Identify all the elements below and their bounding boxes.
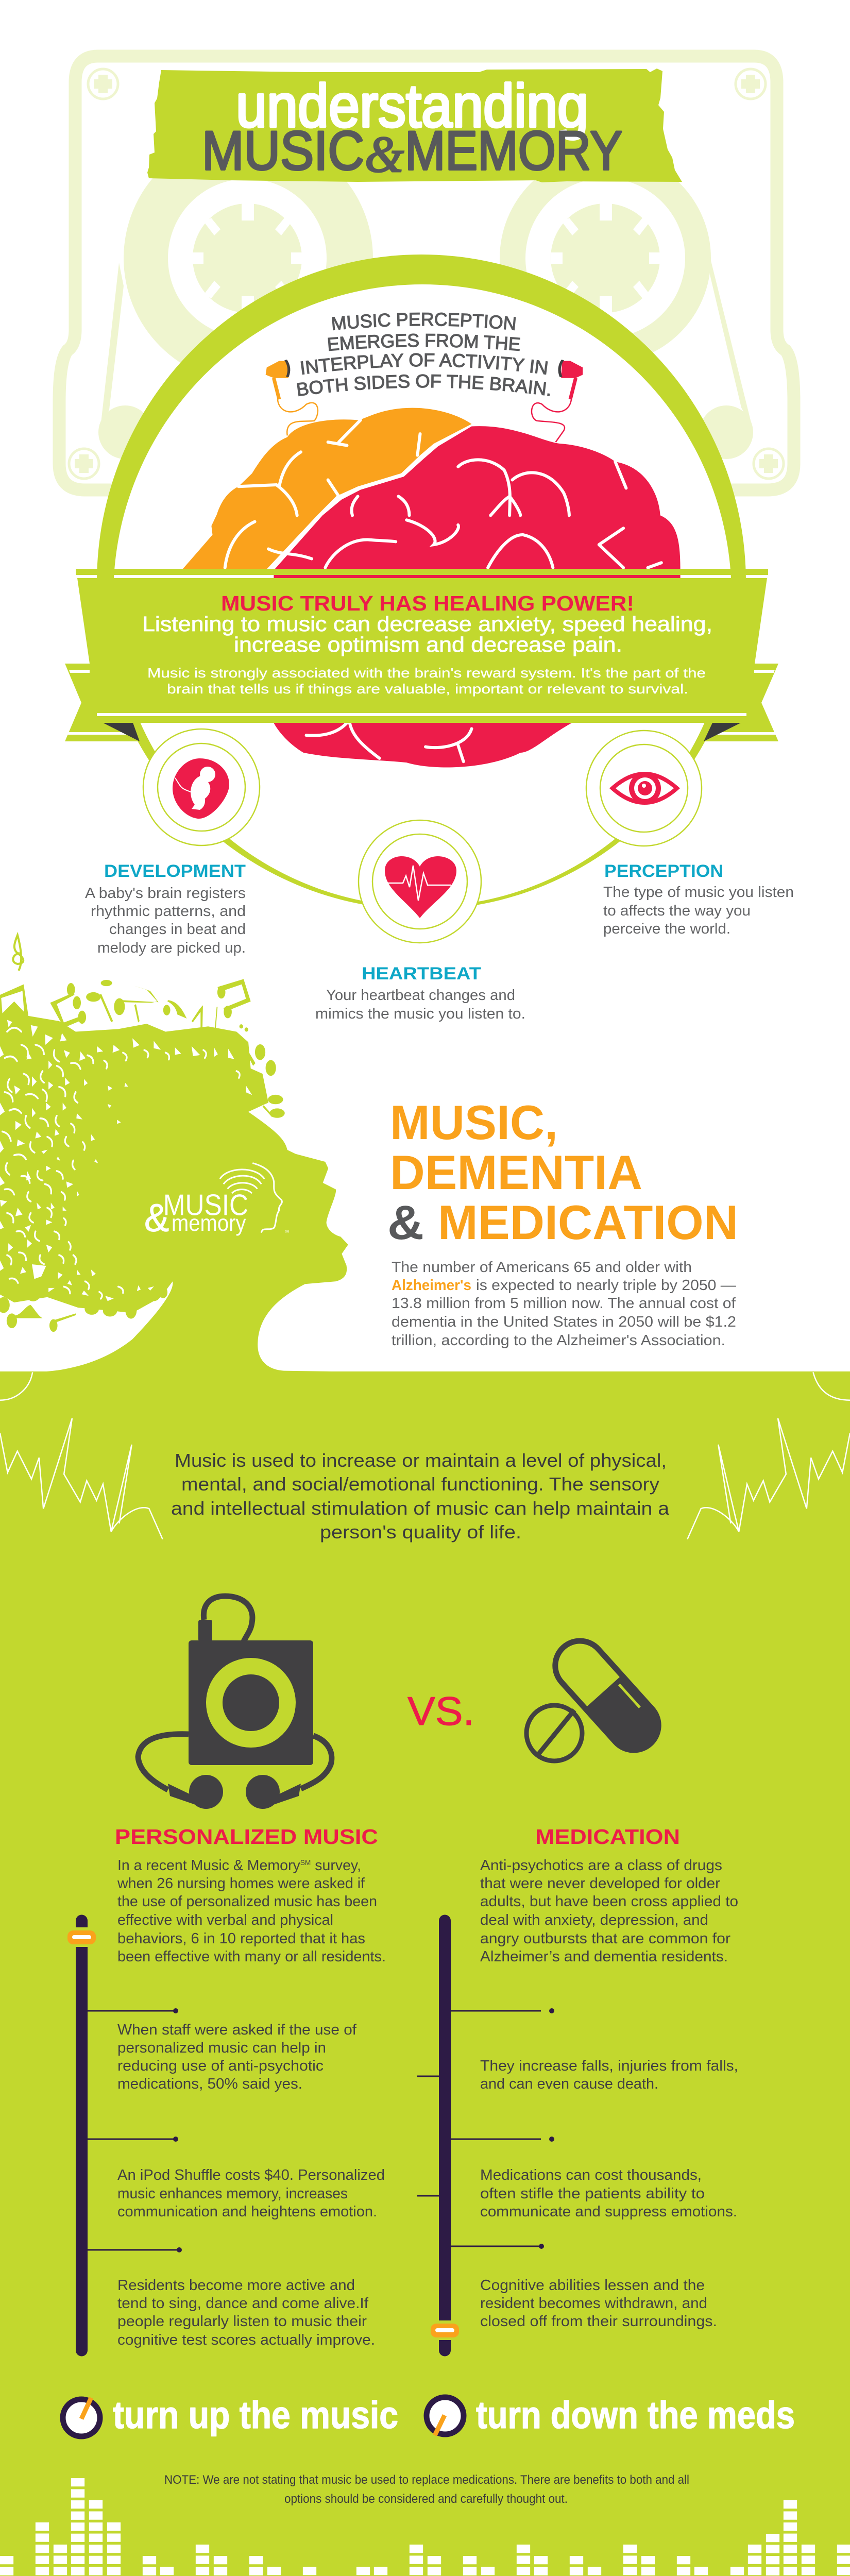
music and memory logo: SM bbox=[285, 1231, 290, 1234]
development text: A baby's brain registers bbox=[85, 885, 246, 902]
music and memory logo bbox=[144, 1189, 290, 1240]
equalizer bars bbox=[7, 2478, 844, 2576]
medication text: often stifle the patients ability to bbox=[480, 2185, 705, 2202]
personalized music text: An iPod Shuffle costs $40. Personalized bbox=[117, 2167, 385, 2183]
medication text: Cognitive abilities lessen and the bbox=[480, 2277, 705, 2294]
personalized music text: Residents become more active and bbox=[117, 2277, 355, 2294]
slogan: turn up the music: turn up the music bbox=[113, 2394, 398, 2436]
slogan: turn down the meds: turn down the meds bbox=[476, 2394, 795, 2436]
arched brain caption bbox=[297, 312, 550, 397]
personalized music text: when 26 nursing homes were asked if bbox=[117, 1875, 365, 1892]
title banner bbox=[147, 69, 682, 183]
quality of life text: mental, and social/emotional functioning. The sensory bbox=[181, 1473, 659, 1495]
head shape bbox=[0, 985, 371, 1389]
music and memory logo: memory bbox=[172, 1210, 246, 1236]
head arch bbox=[97, 255, 746, 910]
quality of life text bbox=[171, 1450, 670, 1543]
music and memory logo: & bbox=[144, 1196, 169, 1240]
personalized music text: the use of personalized music has been bbox=[117, 1893, 377, 1910]
title words: music & memory: MUSIC bbox=[202, 120, 364, 181]
personalized music text: survey, bbox=[311, 1857, 361, 1874]
title words: music & memory bbox=[202, 120, 622, 183]
personalized music text bbox=[117, 1857, 386, 2348]
icon: development fetus bbox=[143, 729, 260, 845]
outlying notes bbox=[0, 979, 285, 1332]
personalized music text: communication and heightens emotion. bbox=[117, 2204, 377, 2220]
arched brain caption: MUSIC PERCEPTION bbox=[332, 312, 516, 331]
personalized music text: In a recent Music & Memory bbox=[117, 1857, 303, 1874]
medication text: deal with anxiety, depression, and bbox=[480, 1912, 708, 1928]
heartbeat text: mimics the music you listen to. bbox=[315, 1006, 525, 1022]
healing power ribbon bbox=[65, 569, 778, 741]
ribbon detail text bbox=[147, 665, 706, 697]
medication text: and can even cause death. bbox=[480, 2076, 658, 2092]
logo sound arcs and profile bbox=[220, 1163, 282, 1233]
disclaimer note: NOTE: We are not stating that music be used to replace medications. There are benefits to both and all bbox=[164, 2473, 689, 2487]
small white gaps between notes bbox=[0, 991, 252, 1301]
brain folds bbox=[225, 420, 661, 761]
audio waveform right bbox=[687, 1372, 850, 1539]
personalized music text: tend to sing, dance and come alive.If bbox=[117, 2295, 369, 2312]
medication text: They increase falls, injuries from falls, bbox=[480, 2058, 738, 2074]
medication text: Anti-psychotics are a class of drugs bbox=[480, 1857, 722, 1874]
quality of life text: person's quality of life. bbox=[320, 1521, 521, 1543]
heading: music dementia medication: DEMENTIA bbox=[390, 1145, 642, 1199]
alzheimer's statistic text: dementia in the United States in 2050 will be $1.2 bbox=[392, 1314, 736, 1330]
disclaimer note bbox=[164, 2473, 689, 2506]
ribbon statement: increase optimism and decrease pain. bbox=[234, 633, 622, 656]
heading: music dementia medication: MUSIC, bbox=[390, 1095, 558, 1149]
title words: music & memory: MEMORY bbox=[405, 120, 622, 181]
orange hemisphere bbox=[182, 408, 472, 570]
cassette tape background illustration bbox=[59, 56, 794, 490]
title word: understanding: understanding bbox=[236, 72, 588, 140]
medication text: Medications can cost thousands, bbox=[480, 2167, 702, 2183]
personalized music text: cognitive test scores actually improve. bbox=[117, 2332, 375, 2348]
alzheimer's statistic text: trillion, according to the Alzheimer's Association. bbox=[392, 1332, 725, 1349]
audio waveform left bbox=[0, 1372, 163, 1539]
personalized music text: music enhances memory, increases bbox=[117, 2185, 348, 2202]
title words: music & memory: & bbox=[365, 126, 404, 183]
icon: heartbeat bbox=[359, 820, 481, 943]
perception text: perceive the world. bbox=[603, 921, 730, 937]
perception text: to affects the way you bbox=[603, 903, 751, 919]
medication text: resident becomes withdrawn, and bbox=[480, 2295, 707, 2312]
icon: pills bbox=[526, 1629, 672, 1764]
alzheimer's statistic text bbox=[392, 1259, 736, 1349]
personalized music text: reducing use of anti-psychotic bbox=[117, 2058, 324, 2074]
perception text bbox=[603, 861, 794, 937]
perception text: The type of music you listen bbox=[603, 884, 794, 901]
ribbon detail text: brain that tells us if things are valuable, important or relevant to survival. bbox=[167, 681, 688, 697]
quality of life text: Music is used to increase or maintain a level of physical, bbox=[175, 1450, 667, 1471]
development text: melody are picked up. bbox=[97, 940, 246, 956]
icon: volume knob up bbox=[63, 2398, 100, 2436]
development text bbox=[85, 861, 246, 956]
heartbeat text: Your heartbeat changes and bbox=[326, 987, 515, 1004]
personalized music text: people regularly listen to music their bbox=[117, 2313, 367, 2330]
heartbeat text bbox=[315, 964, 525, 1022]
medication text bbox=[480, 1857, 738, 2330]
disclaimer note: options should be considered and carefully thought out. bbox=[284, 2492, 568, 2506]
slider: personalized music track bbox=[67, 1914, 182, 2357]
medication text: that were never developed for older bbox=[480, 1875, 720, 1892]
personalized music text: When staff were asked if the use of bbox=[117, 2022, 357, 2038]
personalized music text: been effective with many or all residents. bbox=[117, 1948, 386, 1965]
medication text: closed off from their surroundings. bbox=[480, 2313, 717, 2330]
medication text: Alzheimer’s and dementia residents. bbox=[480, 1948, 728, 1965]
development text: rhythmic patterns, and bbox=[91, 903, 246, 920]
earbuds bbox=[266, 360, 583, 442]
icon: volume knob down bbox=[427, 2397, 464, 2435]
music and memory logo: MUSIC bbox=[163, 1189, 248, 1222]
personalized music text: personalized music can help in bbox=[117, 2040, 326, 2056]
development text: DEVELOPMENT bbox=[104, 861, 246, 881]
pink hemisphere bbox=[274, 426, 681, 768]
quality of life text: and intellectual stimulation of music can help maintain a bbox=[171, 1498, 670, 1519]
alzheimer's statistic text: 13.8 million from 5 million now. The annual cost of bbox=[392, 1295, 736, 1312]
personalized music text: SM bbox=[300, 1858, 311, 1867]
ribbon detail text: Music is strongly associated with the brain's reward system. It's the part of the bbox=[147, 665, 706, 681]
personalized music text: effective with verbal and physical bbox=[117, 1912, 333, 1928]
curved white note outlines bbox=[3, 1028, 240, 1299]
heading: music dementia medication: MEDICATION bbox=[438, 1195, 738, 1249]
orange earbud bbox=[266, 360, 318, 435]
ribbon statement: Listening to music can decrease anxiety, speed healing, bbox=[142, 612, 712, 636]
personalized music text: medications, 50% said yes. bbox=[117, 2076, 302, 2092]
icon: treble clef bbox=[13, 935, 23, 971]
perception text: PERCEPTION bbox=[604, 861, 723, 881]
heading: music dementia medication bbox=[387, 1095, 738, 1249]
heartbeat text: HEARTBEAT bbox=[362, 964, 481, 984]
arched brain caption: EMERGES FROM THE bbox=[328, 333, 520, 351]
icon: perception eye bbox=[586, 731, 702, 846]
alzheimer's statistic text: is expected to nearly triple by 2050 — bbox=[476, 1277, 736, 1294]
icon: music player with earbuds bbox=[138, 1596, 332, 1809]
heading: music dementia medication: & bbox=[387, 1195, 424, 1249]
head silhouette with musical notes bbox=[0, 979, 371, 1389]
red earbud bbox=[532, 360, 583, 442]
alzheimer's statistic text: Alzheimer's bbox=[392, 1277, 471, 1294]
medication text: communicate and suppress emotions. bbox=[480, 2204, 737, 2220]
brain bbox=[182, 408, 681, 768]
column heading: medication: MEDICATION bbox=[535, 1825, 680, 1849]
slider: medication track bbox=[417, 1914, 554, 2357]
alzheimer's statistic text: The number of Americans 65 and older with bbox=[392, 1259, 692, 1276]
medication text: adults, but have been cross applied to bbox=[480, 1893, 738, 1910]
ribbon headline: MUSIC TRULY HAS HEALING POWER! bbox=[221, 591, 634, 615]
arched brain caption: INTERPLAY OF ACTIVITY IN bbox=[301, 353, 548, 375]
development text: changes in beat and bbox=[109, 921, 246, 938]
personalized music text: behaviors, 6 in 10 reported that it has bbox=[117, 1930, 365, 1947]
ribbon statement bbox=[142, 612, 712, 656]
section background: green bbox=[0, 1371, 850, 2576]
medication text: angry outbursts that are common for bbox=[480, 1930, 730, 1947]
arched brain caption: BOTH SIDES OF THE BRAIN. bbox=[297, 374, 550, 397]
vs label: VS. bbox=[407, 1688, 474, 1734]
column heading: personalized music: PERSONALIZED MUSIC bbox=[115, 1825, 378, 1849]
